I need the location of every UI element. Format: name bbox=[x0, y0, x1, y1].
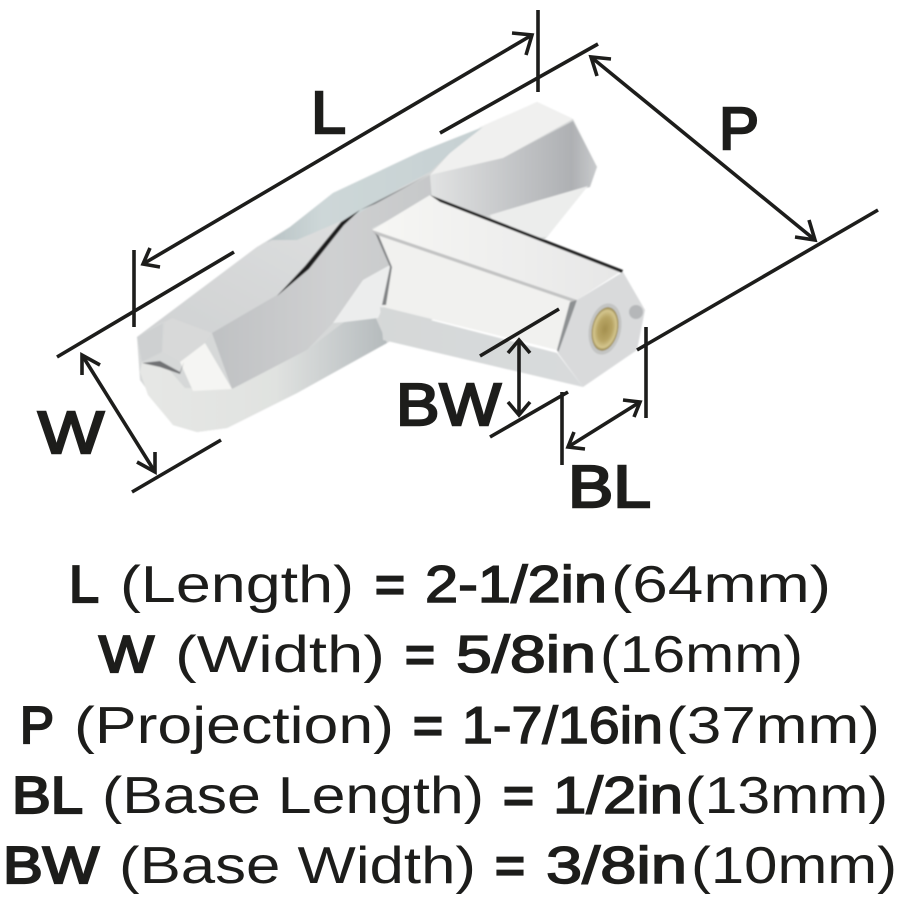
spec: projection bbox=[20, 697, 880, 755]
knob crossbar bbox=[137, 102, 597, 432]
far right grey facet bbox=[430, 121, 597, 218]
dimension BL bbox=[568, 327, 646, 449]
dimension BW bbox=[480, 309, 568, 465]
small pin bbox=[629, 305, 643, 319]
spec: width: W bbox=[99, 626, 154, 684]
spec: length: (64mm) bbox=[611, 556, 831, 614]
label P: P bbox=[719, 96, 759, 162]
label BW: BW bbox=[396, 372, 501, 438]
label W: W bbox=[38, 400, 104, 466]
spec: length: L bbox=[69, 556, 99, 614]
label BL: BL bbox=[568, 454, 651, 520]
spec: base width: = bbox=[495, 837, 525, 895]
dimension W bbox=[82, 355, 221, 492]
stem top face bbox=[372, 195, 623, 300]
knob end face bbox=[558, 272, 645, 387]
spec: width: = bbox=[405, 626, 435, 684]
curved black crease bbox=[277, 210, 360, 296]
far right lower facet bbox=[490, 186, 588, 240]
dimension P bbox=[57, 44, 878, 357]
teal back strip bbox=[267, 127, 483, 242]
spec: width: (Width) bbox=[175, 626, 385, 684]
spec: width: 5/8in bbox=[456, 626, 596, 684]
threaded brass hole bbox=[584, 300, 626, 358]
spec: base length: (13mm) bbox=[685, 767, 888, 825]
spec: projection: 1-7/16in bbox=[462, 697, 663, 755]
spec: base width: BW bbox=[3, 837, 99, 895]
spec: length bbox=[69, 556, 831, 614]
stem bottom band bbox=[380, 307, 583, 387]
spec: base length: = bbox=[503, 767, 534, 825]
spec: width bbox=[99, 626, 803, 684]
spec: length: (Length) bbox=[120, 556, 354, 614]
spec: base length: BL bbox=[12, 767, 83, 825]
inner joint bbox=[333, 265, 390, 323]
base silhouette bbox=[137, 102, 597, 432]
spec: projection: = bbox=[413, 697, 443, 755]
spec: base length: 1/2in bbox=[553, 767, 683, 825]
dimension lines and arrows bbox=[57, 10, 878, 492]
spec: base width: (10mm) bbox=[691, 837, 897, 895]
end facets bbox=[137, 323, 163, 362]
spec: base width: 3/8in bbox=[546, 837, 687, 895]
illustration: T-shaped chrome knob bbox=[137, 102, 645, 432]
spec: base width: (Base Width) bbox=[119, 837, 476, 895]
far right upper facet bbox=[430, 102, 573, 175]
lower band bbox=[140, 305, 387, 432]
spec: projection: P bbox=[20, 697, 54, 755]
spec: base width bbox=[3, 837, 897, 895]
spec: base length: (Base Length) bbox=[102, 767, 484, 825]
upper facet bbox=[137, 175, 430, 337]
spec: width: (16mm) bbox=[600, 626, 803, 684]
specifications text bbox=[3, 556, 897, 895]
spec: base length bbox=[12, 767, 888, 825]
spec: projection: (37mm) bbox=[666, 697, 880, 755]
knob stem bbox=[372, 195, 645, 387]
spec: length: 2-1/2in bbox=[425, 556, 607, 614]
stem edges bbox=[430, 195, 623, 273]
spec: length: = bbox=[375, 556, 405, 614]
label L: L bbox=[311, 80, 346, 146]
stem side face bbox=[375, 233, 577, 350]
spec: projection: (Projection) bbox=[74, 697, 394, 755]
dimension L bbox=[134, 10, 538, 327]
main grey facet bbox=[212, 175, 432, 389]
